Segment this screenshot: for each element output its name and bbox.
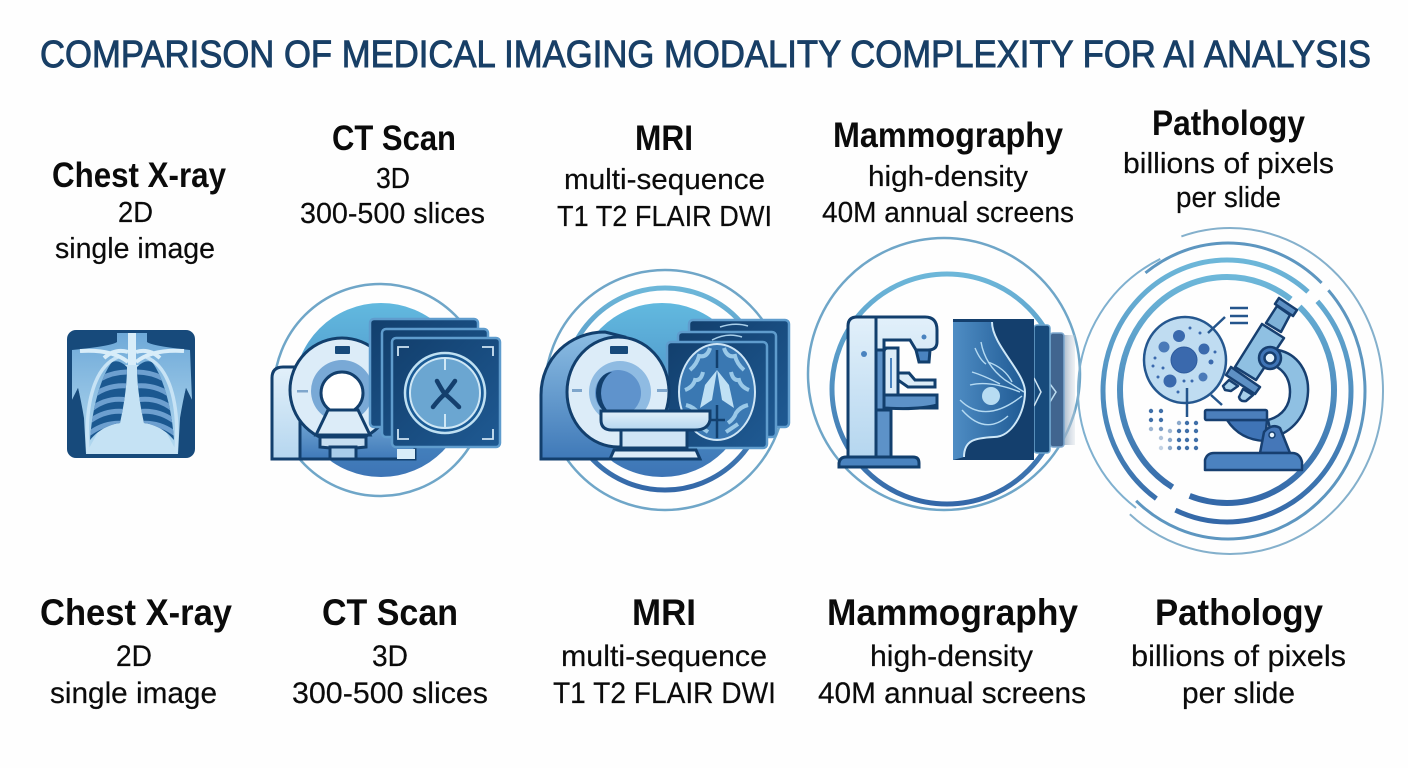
mammography machine: [839, 317, 937, 467]
icon: chest X-ray: [67, 330, 195, 458]
column header: CT Scan: [300, 119, 485, 230]
brain scan: [679, 344, 755, 440]
cell: [1144, 317, 1226, 403]
icon: CT scanner with slices: [272, 284, 500, 496]
column header: Chest X-ray: single image: [55, 233, 215, 265]
column footer: Pathology: [1131, 592, 1346, 710]
column footer: CT Scan: CT Scan: [322, 592, 458, 633]
column footer: Mammography: high-density: [870, 640, 1033, 673]
column header: MRI: multi-sequence: [564, 164, 765, 196]
icon: pathology rings, cell and microscope: [1077, 228, 1383, 554]
column footer: Pathology: per slide: [1182, 677, 1295, 710]
microscope: [1205, 298, 1308, 470]
column footer: Pathology: Pathology: [1155, 592, 1323, 633]
icon: MRI scanner with slices: [541, 270, 789, 510]
column footer: Mammography: [818, 592, 1086, 710]
column header: Pathology: per slide: [1176, 182, 1281, 214]
column header: MRI: MRI: [635, 119, 693, 158]
breast image: [953, 319, 1034, 460]
column header: CT Scan: CT Scan: [332, 119, 456, 158]
column header: Mammography: 40M annual screens: [822, 197, 1074, 229]
column footer: CT Scan: 3D: [372, 640, 408, 673]
column header: Mammography: [822, 116, 1074, 229]
pixel dots: [1149, 409, 1198, 450]
column footer: MRI: [553, 592, 776, 710]
column footer: Chest X-ray: Chest X-ray: [40, 592, 232, 633]
column header: CT Scan: 300-500 slices: [300, 198, 485, 230]
column footer: MRI: T1 T2 FLAIR DWI: [553, 677, 776, 710]
scanner body: [272, 338, 415, 459]
column footer: Chest X-ray: [40, 592, 232, 710]
column header: Chest X-ray: Chest X-ray: [52, 156, 226, 195]
axial brain: [405, 353, 485, 433]
image stack: [1060, 335, 1075, 445]
column footer: CT Scan: [292, 592, 488, 710]
column footer: MRI: MRI: [632, 592, 696, 633]
slice stack: [689, 320, 789, 427]
column footer: Mammography: Mammography: [827, 592, 1078, 633]
column header: MRI: [557, 119, 772, 233]
column header: Mammography: high-density: [868, 161, 1029, 193]
column header: Pathology: Pathology: [1152, 104, 1305, 143]
column header: Pathology: [1123, 104, 1334, 214]
column footer: Chest X-ray: single image: [50, 677, 217, 710]
column header: Pathology: billions of pixels: [1123, 148, 1334, 180]
column header: Chest X-ray: 2D: [118, 197, 153, 229]
column header: CT Scan: 3D: [376, 163, 410, 195]
slice stack: [370, 319, 478, 427]
column footer: MRI: multi-sequence: [561, 640, 767, 673]
column header: Mammography: Mammography: [833, 116, 1063, 155]
left lung: [86, 357, 128, 452]
right lung: [136, 357, 178, 452]
icon: mammography unit and images: [808, 238, 1080, 510]
column header: MRI: T1 T2 FLAIR DWI: [557, 201, 772, 233]
callout lines: [1187, 308, 1248, 417]
scanner body: [541, 332, 710, 459]
column footer: Chest X-ray: 2D: [116, 640, 152, 673]
column header: Chest X-ray: [52, 156, 226, 265]
column footer: Mammography: 40M annual screens: [818, 677, 1086, 710]
column footer: CT Scan: 300-500 slices: [292, 677, 488, 710]
column footer: Pathology: billions of pixels: [1131, 640, 1346, 673]
